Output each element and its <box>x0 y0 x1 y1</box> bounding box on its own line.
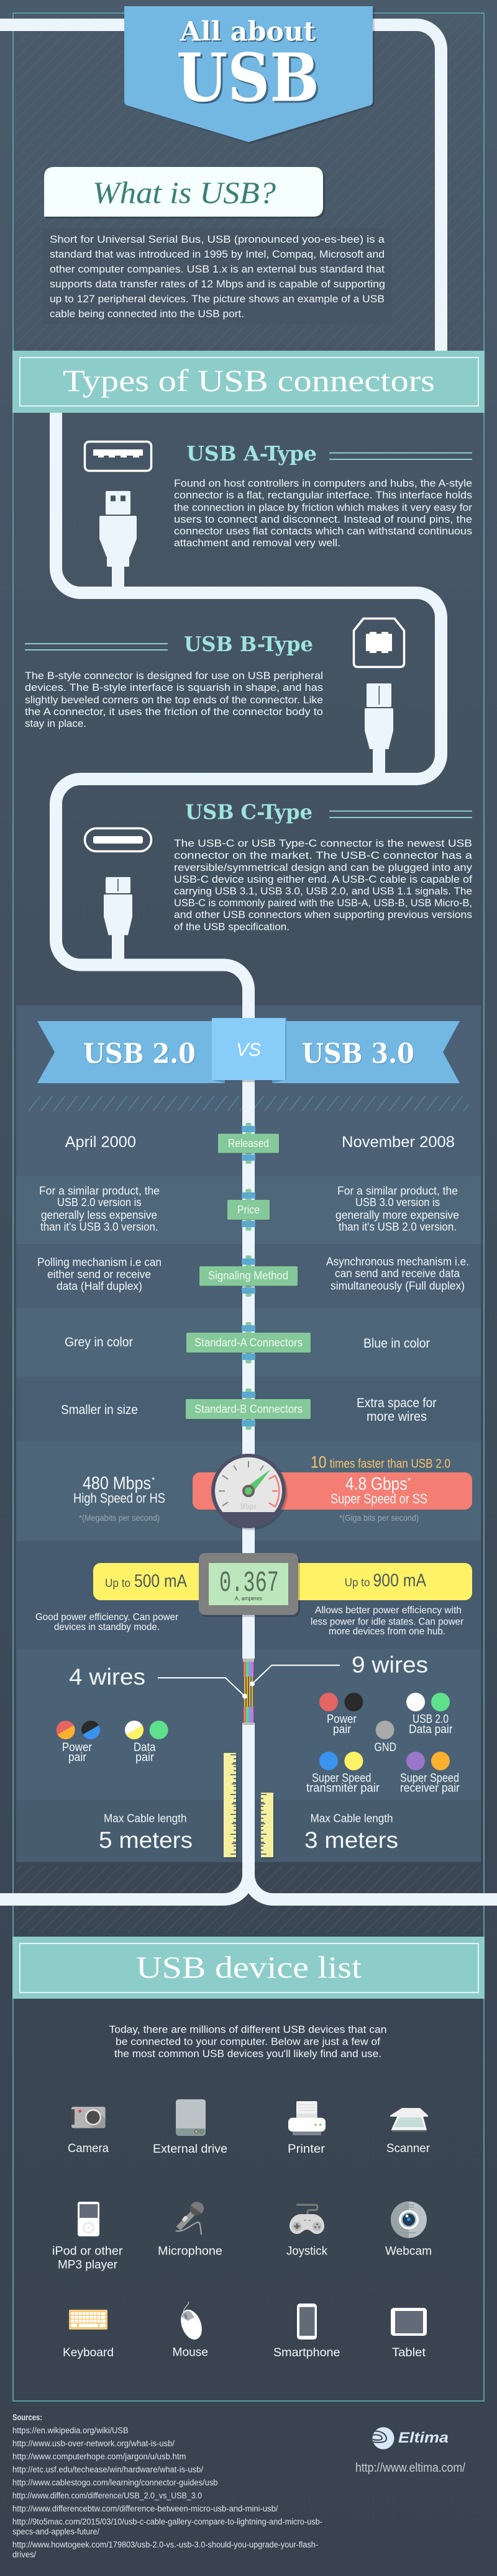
text: USB 3.0 power note <box>311 1605 464 1637</box>
speed callout: 10 times faster <box>311 1453 450 1472</box>
tag: Signaling Method: Signaling Method <box>208 1269 288 1282</box>
cable: top run <box>0 25 441 354</box>
USB 2.0 speed: High Speed or HS <box>73 1490 165 1506</box>
USB C text: reversible/symmetrical design and can be plugged into any <box>174 862 473 873</box>
row: signaling left: data (Half duplex) <box>57 1280 142 1292</box>
tag: Price: Price <box>237 1204 260 1216</box>
row: connector B sizes: more wires <box>367 1410 427 1424</box>
section band: Types of USB connectors <box>12 351 485 413</box>
label: scanner: Scanner <box>386 2141 430 2155</box>
USB A text <box>174 478 473 549</box>
VS box <box>212 1018 286 1080</box>
text: what is USB description: standard that was introduced in 1995 by Intel, Compaq, Microsoft and <box>50 248 385 260</box>
text backing box <box>43 228 391 324</box>
label: iPod: MP3 player <box>58 2258 117 2272</box>
USB 2.0 power: Up to <box>105 1577 130 1589</box>
USB B port icon <box>354 618 404 667</box>
text: USB 2.0 power note: devices in standby mode. <box>54 1622 160 1633</box>
row: signaling right: Asynchronous mechanism i.e. <box>326 1255 469 1268</box>
row: release dates: April 2000 <box>65 1133 136 1151</box>
icon: printer <box>288 2101 326 2135</box>
Eltima logo <box>373 2427 449 2449</box>
legend: USB 2.0 wires: pair <box>135 1751 155 1764</box>
tag: Standard-A Connectors: Standard-A Connectors <box>194 1336 303 1349</box>
icon: ammeter: 0.367 <box>219 1567 279 1600</box>
label: mouse: Mouse <box>173 2346 208 2359</box>
legend: USB 3.0 wires: receiver pair <box>400 1782 460 1795</box>
ribbon: USB 2.0: USB 2.0 <box>83 1038 196 1070</box>
row: price left <box>39 1184 160 1233</box>
icon: external drive <box>176 2099 206 2136</box>
USB C text: USB-C device using either end. A USB-C cable is capable of <box>174 874 472 885</box>
text: max length USB 3.0 <box>304 1813 398 1853</box>
tag: Price <box>227 1189 270 1230</box>
USB C heading <box>185 799 472 824</box>
Eltima logo: Eltima <box>398 2430 449 2446</box>
hatched background above device list <box>16 1866 481 1933</box>
text: what is USB description: up to 127 peripheral devices. The picture shows an example of a USB <box>50 293 385 305</box>
text: device list intro: Today, there are millions of different USB devices that can <box>109 2024 386 2035</box>
USB C port icon <box>84 828 152 852</box>
text: max length USB 2.0: Max Cable length <box>104 1813 186 1825</box>
USB C text: and other USB connectors when supporting previous versions <box>174 909 472 921</box>
cable cutaway wires <box>242 1659 255 1727</box>
cable: winding run through connector types <box>56 410 441 1659</box>
USB A text: connector uses flat contacts which can withstand continuous <box>174 526 472 537</box>
USB 2.0 speed <box>73 1474 165 1523</box>
legend: USB 2.0 wires: Data <box>134 1741 156 1754</box>
section band: USB device list <box>12 1937 485 1999</box>
USB A text: the connection in place by friction which makes it very easy for <box>174 502 473 513</box>
tag: Released <box>218 1123 280 1164</box>
legend: USB 3.0 wires: Super Speed <box>312 1772 372 1785</box>
icon: iPod <box>78 2202 99 2236</box>
text: max length USB 3.0: 3 meters <box>304 1827 398 1853</box>
legend: USB 3.0 wires: USB 2.0 <box>413 1713 449 1726</box>
USB 2.0 power: 500 mA <box>134 1572 188 1592</box>
hatch strip under ribbons <box>29 1096 468 1111</box>
text: device list intro: be connected to your computer. Below are just a few of <box>116 2036 380 2047</box>
icon: scanner <box>390 2108 428 2132</box>
text: USB 2.0 power note <box>35 1612 179 1633</box>
row: signaling right: simultaneously (Full duplex) <box>331 1280 465 1292</box>
USB B heading <box>25 632 313 656</box>
row: signaling left <box>37 1256 162 1292</box>
USB 3.0 power: 900 mA <box>373 1570 427 1590</box>
icon: ammeter <box>199 1553 300 1617</box>
title: All about: All about <box>180 16 316 47</box>
icon: keyboard <box>69 2310 107 2330</box>
row: connector B sizes: Extra space for <box>357 1396 437 1410</box>
sources list: http://www.differencebtw.com/difference-between-micro-usb-and-mini-usb/ <box>12 2504 278 2513</box>
speed callout: 10 times faster: times faster than USB 2.0 <box>330 1457 450 1471</box>
label: joystick: Joystick <box>286 2245 327 2258</box>
USB C text: connector on the market. The USB-C connector has a <box>174 850 473 862</box>
sources list: http://www.computerhope.com/jargon/u/usb.htm <box>12 2452 186 2461</box>
heading: What is USB?: What is USB? <box>93 175 276 210</box>
row: price left: USB 2.0 version is <box>57 1196 142 1209</box>
legend: USB 2.0 wires: pair <box>68 1751 87 1764</box>
legend: USB 3.0 wires: Super Speed <box>400 1772 459 1785</box>
row: price right: USB 3.0 version is <box>355 1196 440 1209</box>
title: USB: USB <box>176 40 319 117</box>
banner <box>124 6 375 144</box>
legend: USB 2.0 wires <box>57 1721 168 1764</box>
USB 2.0 speed: * <box>152 1475 155 1485</box>
speed callout: 10 times faster: 10 <box>311 1453 327 1472</box>
row: price right: For a similar product, the <box>337 1184 458 1197</box>
legend: USB 3.0 wires: Data pair <box>409 1723 453 1736</box>
sources list: http://www.cablestogo.com/learning/connector-guides/usb <box>12 2478 217 2487</box>
ribbon: USB 3.0: USB 3.0 <box>302 1038 414 1070</box>
text: max length USB 3.0: Max Cable length <box>311 1813 393 1825</box>
text: what is USB description: cable being connected into the USB port. <box>50 308 244 320</box>
row: signaling left: Polling mechanism i.e can <box>37 1256 162 1269</box>
USB 3.0 power <box>345 1570 427 1590</box>
row: signaling right: can send and receive data <box>335 1268 460 1280</box>
tag: Signaling Method <box>199 1255 298 1297</box>
label: webcam: Webcam <box>385 2245 432 2258</box>
USB B plug icon <box>365 683 393 773</box>
VS box: VS <box>236 1040 261 1060</box>
USB 2.0 power <box>105 1572 188 1592</box>
USB B text: devices. The B-style interface is squarish in shape, and has <box>25 682 323 693</box>
ruler: 5 meters <box>224 1753 237 1858</box>
label: smartphone: Smartphone <box>273 2346 340 2359</box>
USB C heading: USB C-Type <box>185 799 312 824</box>
section band: USB device list: USB device list <box>136 1950 362 1984</box>
row: signaling left: either send or receive <box>47 1268 151 1281</box>
USB C text: USB-C is commonly paired with the USB-A, USB-B, USB Micro-B, <box>174 898 472 909</box>
USB A plug icon <box>99 491 137 587</box>
sources heading: Sources: <box>12 2413 42 2422</box>
USB B heading: USB B-Type <box>184 632 313 656</box>
sources list <box>12 2426 322 2559</box>
USB B text: the A connector, it uses the friction of the connector body to <box>25 706 323 718</box>
sources list: http://9to5mac.com/2015/03/10/usb-c-cable-gallery-compare-to-lightning-and-micro-usb- <box>12 2517 322 2526</box>
icon: joystick <box>290 2205 324 2234</box>
text: device list intro: the most common USB devices you'll likely find and use. <box>114 2048 381 2060</box>
ruler: 3 meters <box>261 1793 275 1858</box>
tag: Standard-A Connectors <box>186 1322 311 1363</box>
comparison panel background <box>16 1006 481 1862</box>
text: max length USB 2.0 <box>99 1813 193 1853</box>
USB 3.0 speed: *(Giga bits per second) <box>339 1513 419 1523</box>
icon: camera <box>71 2107 106 2128</box>
sources list: https://en.wikipedia.org/wiki/USB <box>12 2426 129 2435</box>
callout: 4 wires: 4 wires <box>69 1664 145 1690</box>
label: iPod: iPod or other <box>52 2245 123 2258</box>
section band: Types of USB connectors: Types of USB connectors <box>63 363 435 398</box>
hatched background of intro <box>16 16 481 351</box>
icon: tablet <box>391 2308 427 2336</box>
USB 3.0 speed <box>331 1474 427 1523</box>
icon: speed gauge <box>211 1454 288 1530</box>
USB C text: carrying USB 3.1, USB 3.0, USB 2.0, and USB 1.1 signals. The <box>174 886 472 897</box>
USB A text: users to connect and disconnect. Instead of round pins, the <box>174 514 472 525</box>
row: connector A colors <box>65 1335 430 1351</box>
callout: 9 wires <box>250 1652 428 1687</box>
label: keyboard: Keyboard <box>63 2346 114 2359</box>
label: tablet: Tablet <box>392 2346 426 2359</box>
cable shadow under VS box <box>242 1080 255 1083</box>
sources list: http://www.howtogeek.com/179803/usb-2.0-vs.-usb-3.0-should-you-upgrade-your-flash- <box>12 2540 318 2549</box>
callout: 4 wires <box>69 1664 247 1699</box>
USB B text: stay in place. <box>25 718 86 729</box>
USB B text <box>25 670 323 729</box>
heading: What is USB? <box>44 167 325 218</box>
USB A heading <box>186 441 472 466</box>
text: what is USB description: other computer companies. USB 1.x is an external bus standard that <box>50 263 385 275</box>
ribbon: USB 2.0 <box>37 1021 225 1083</box>
USB 2.0 speed: *(Megabits per second) <box>79 1513 160 1523</box>
USB A heading: USB A-Type <box>186 441 317 466</box>
USB A text: Found on host controllers in computers and hubs, the A-style <box>174 478 472 489</box>
text: device list intro <box>109 2024 386 2060</box>
label: camera: Camera <box>68 2141 109 2155</box>
USB C plug icon <box>104 877 132 960</box>
Eltima url: http://www.eltima.com/ <box>355 2461 465 2475</box>
row: price left: than it's USB 3.0 version. <box>40 1220 158 1233</box>
yellow power bar <box>93 1563 472 1600</box>
text: USB 3.0 power note: more devices from one hub. <box>329 1626 445 1637</box>
legend: USB 3.0 wires: Power <box>327 1713 357 1726</box>
USB B text: The B-style connector is designed for use on USB peripheral <box>25 670 323 682</box>
legend: USB 3.0 wires <box>306 1693 460 1795</box>
tag: Released: Released <box>228 1137 269 1150</box>
text: USB 3.0 power note: less power for idle states. Can power <box>311 1616 464 1627</box>
text: USB 3.0 power note: Allows better power efficiency with <box>315 1605 462 1616</box>
USB 3.0 power: Up to <box>345 1577 370 1589</box>
ribbon: USB 3.0 <box>272 1021 460 1083</box>
USB A text: attachment and removal very well. <box>174 538 340 549</box>
label: iPod <box>52 2245 123 2272</box>
icon: microphone <box>176 2202 204 2235</box>
icon: speed gauge: Mbps <box>240 1502 257 1511</box>
USB A port icon <box>84 442 152 471</box>
label: external drive: External drive <box>153 2142 227 2156</box>
text: max length USB 2.0: 5 meters <box>99 1827 193 1853</box>
row: price right <box>335 1184 459 1233</box>
row: release dates <box>65 1133 455 1151</box>
sources list: specs-and-apples-future/ <box>12 2527 99 2536</box>
USB 3.0 speed: * <box>408 1475 411 1485</box>
legend: USB 3.0 wires: transmiter pair <box>306 1782 380 1795</box>
USB 2.0 speed: 480 Mbps <box>83 1474 151 1493</box>
text: USB 2.0 power note: Good power efficiency. Can power <box>35 1612 179 1623</box>
USB A text: connector is a flat, rectangular interface. This interface holds <box>174 490 472 501</box>
sources list: drives/ <box>12 2550 36 2559</box>
USB 3.0 speed: 4.8 Gbps <box>345 1474 408 1494</box>
icon: webcam <box>391 2201 427 2238</box>
USB C text: of the USB specification. <box>174 921 290 932</box>
sources list: http://www.usb-over-network.org/what-is-usb/ <box>12 2439 175 2448</box>
icon: smartphone <box>297 2304 317 2340</box>
row: price left: For a similar product, the <box>39 1184 160 1197</box>
callout: 9 wires: 9 wires <box>352 1652 428 1677</box>
legend: USB 3.0 wires: pair <box>333 1723 352 1736</box>
USB C text <box>174 838 473 932</box>
row: signaling right <box>326 1255 469 1292</box>
row: price left: generally less expensive <box>41 1209 157 1222</box>
red speed bar <box>193 1472 472 1510</box>
text: what is USB description: Short for Universal Serial Bus, USB (pronounced yoo-es-bee) is a <box>50 233 385 245</box>
USB 3.0 speed: Super Speed or SS <box>331 1491 427 1506</box>
text: what is USB description <box>50 233 385 320</box>
label: printer: Printer <box>288 2142 326 2156</box>
tag: Standard-B Connectors <box>186 1389 311 1430</box>
row: price right: than it's USB 2.0 version. <box>339 1220 457 1233</box>
sources list: http://etc.usf.edu/techease/win/hardware/what-is-usb/ <box>12 2465 203 2474</box>
row: release dates: November 2008 <box>342 1133 455 1151</box>
row: connector A colors: Grey in color <box>65 1335 133 1349</box>
icon: mouse <box>177 2302 206 2343</box>
text: what is USB description: supports data transfer rates of 12 Mbps and is capable of supporting <box>50 278 385 290</box>
USB C text: The USB-C or USB Type-C connector is the newest USB <box>174 838 472 849</box>
row: connector A colors: Blue in color <box>363 1336 430 1351</box>
row: price right: generally more expensive <box>335 1209 459 1222</box>
cable: fork to page edges <box>0 1725 497 1899</box>
legend: USB 2.0 wires: Power <box>62 1741 93 1754</box>
legend: USB 3.0 wires: GND <box>374 1741 396 1754</box>
sources list: http://www.diffen.com/difference/USB_2.0_vs_USB_3.0 <box>12 2491 202 2500</box>
USB B text: slightly beveled corners on the top ends of the connector. Like <box>25 695 323 706</box>
row: connector B sizes: Smaller in size <box>61 1403 138 1417</box>
icon: ammeter: A, amperes <box>235 1595 262 1602</box>
label: microphone: Microphone <box>158 2245 222 2258</box>
row: connector B sizes <box>61 1396 437 1424</box>
tag: Standard-B Connectors: Standard-B Connectors <box>194 1403 303 1415</box>
